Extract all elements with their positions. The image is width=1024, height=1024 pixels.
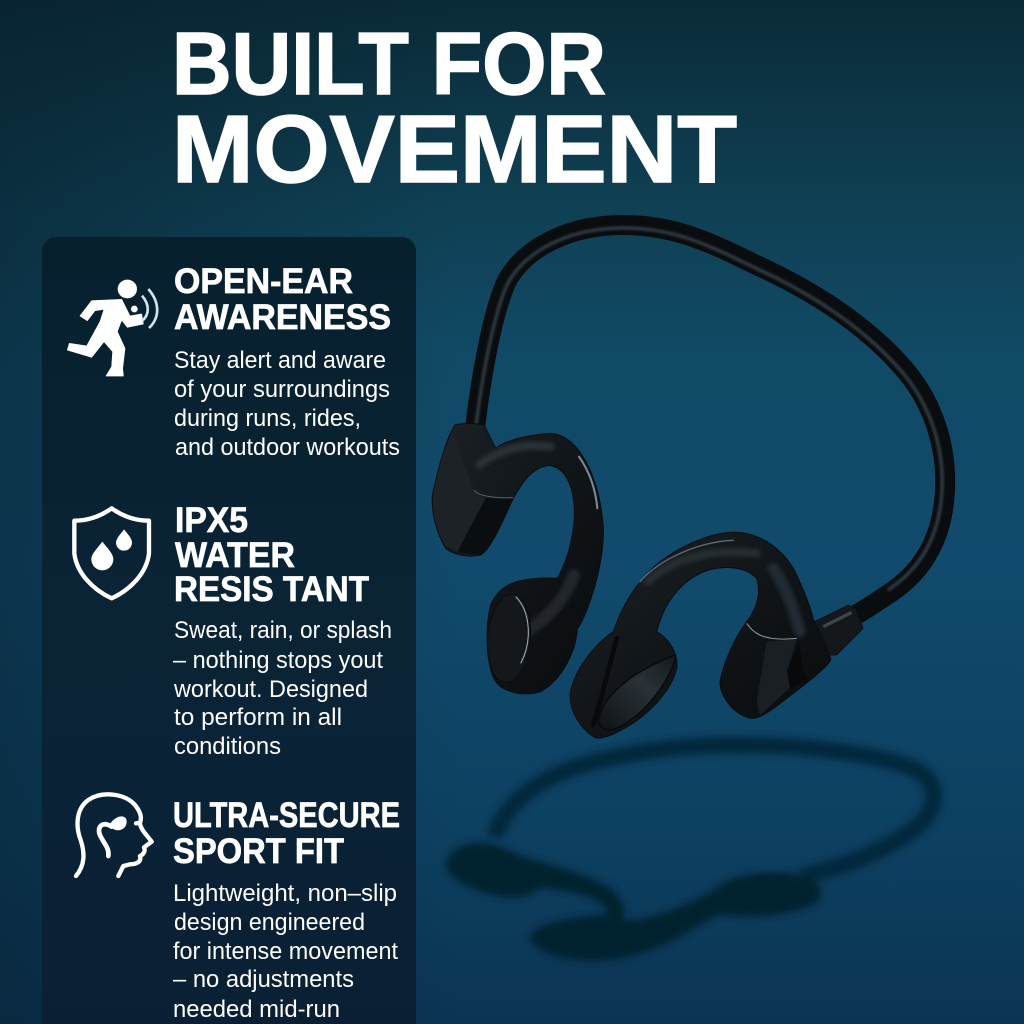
text: sport fit description: design engineered xyxy=(174,909,365,936)
heading: open-ear awareness xyxy=(174,262,391,337)
left housing lower band xyxy=(457,498,513,555)
right ear unit xyxy=(570,532,863,738)
title: MOVEMENT xyxy=(172,96,737,203)
heading: IPX5 water resistant xyxy=(174,501,369,609)
right housing notch xyxy=(788,638,808,688)
icon: shield with water drops xyxy=(74,508,149,598)
text: sport fit description: Lightweight, non–slip xyxy=(173,880,397,907)
text: sport fit description: for intense movement xyxy=(173,938,398,965)
text: sport fit description xyxy=(173,880,398,1023)
text: open-ear description: during runs, rides, xyxy=(174,405,361,432)
heading: open-ear awareness: AWARENESS xyxy=(174,298,391,337)
text: water resistant description: – nothing stops yout xyxy=(173,647,383,674)
title xyxy=(172,14,737,203)
text: water resistant description: workout. Designed xyxy=(173,676,368,703)
text: open-ear description: of your surroundings xyxy=(174,376,390,403)
headphones shadow xyxy=(446,745,934,961)
text: water resistant description: conditions xyxy=(174,733,281,760)
heading: open-ear awareness: OPEN-EAR xyxy=(174,262,353,301)
panel: features xyxy=(42,237,416,1024)
text: open-ear description: and outdoor workouts xyxy=(175,434,400,461)
feature: ultra-secure sport fit xyxy=(76,794,400,1023)
icon: runner with sound waves xyxy=(67,280,157,376)
text: open-ear description xyxy=(174,347,400,461)
heading: IPX5 water resistant: WATER xyxy=(175,536,295,575)
left hook shading xyxy=(479,446,551,465)
left ear unit xyxy=(432,424,603,694)
title: BUILT FOR xyxy=(172,14,606,113)
neckband xyxy=(475,225,945,618)
heading: ultra-secure sport fit: SPORT FIT xyxy=(173,832,344,871)
right arch shading xyxy=(647,552,757,582)
text: sport fit description: – no adjustments xyxy=(173,966,354,993)
left pod disc xyxy=(484,592,534,684)
text: open-ear description: Stay alert and aware xyxy=(174,347,386,374)
icon: head with earbud xyxy=(76,794,152,876)
text: water resistant description: to perform in all xyxy=(174,704,342,731)
headphones xyxy=(432,225,945,738)
ear pad xyxy=(598,655,675,730)
collar xyxy=(814,605,863,655)
heading: ultra-secure sport fit xyxy=(173,796,400,871)
text: water resistant description xyxy=(173,617,392,760)
feature: open-ear awareness xyxy=(67,262,400,461)
text: sport fit description: needed mid-run xyxy=(173,996,340,1023)
right housing facet xyxy=(757,639,797,715)
feature: IPX5 water resistant xyxy=(74,501,392,760)
left housing facet xyxy=(433,432,486,552)
heading: IPX5 water resistant: IPX5 xyxy=(175,501,248,540)
heading: ultra-secure sport fit: ULTRA-SECURE xyxy=(173,796,400,835)
text: water resistant description: Sweat, rain, or splash xyxy=(174,617,392,644)
heading: IPX5 water resistant: RESIS TANT xyxy=(174,570,369,609)
